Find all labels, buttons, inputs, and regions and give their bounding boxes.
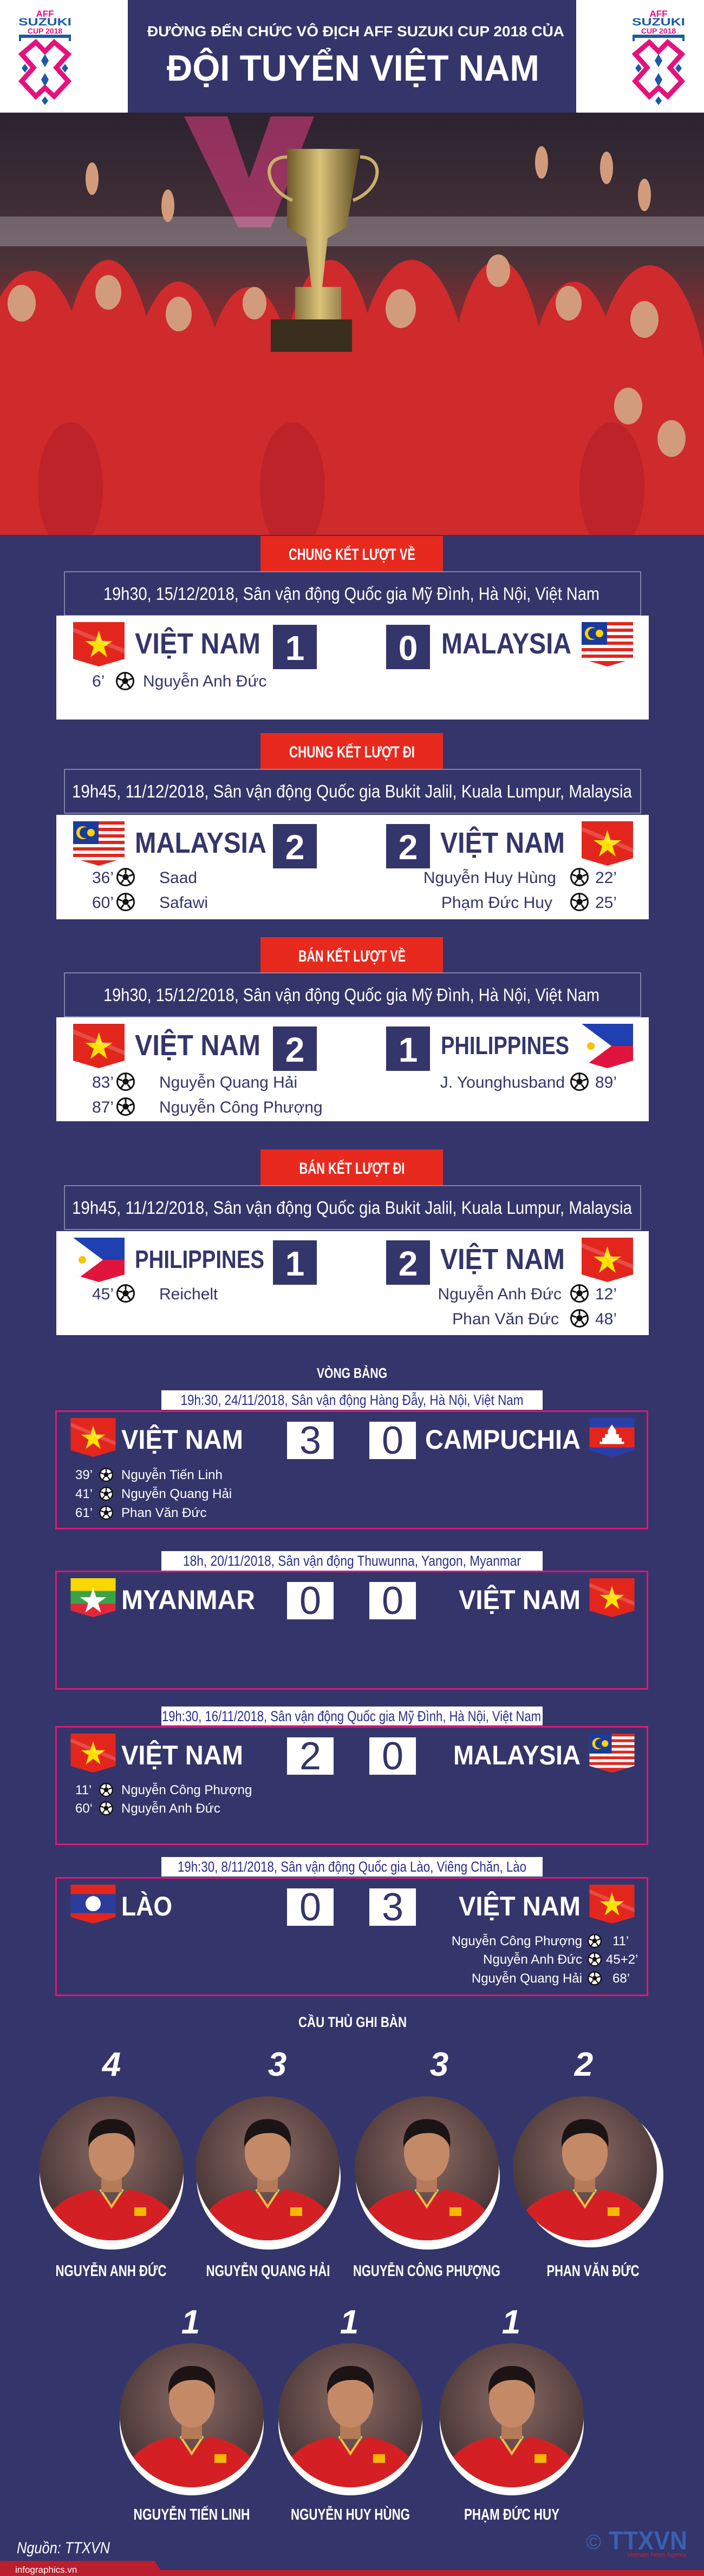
scoreboard: Myanmar 0-0 Việt Nam: VIỆT NAM: [459, 1585, 581, 1615]
title line 2: ĐỘI TUYỂN VIỆT NAM: [167, 47, 539, 89]
footer bar: [0, 2561, 704, 2576]
scoreboard: Philippines 1-2 Việt Nam: Reichelt: [159, 1285, 218, 1303]
scoreboard: Malaysia 2-2 Việt Nam: 60’: [92, 894, 114, 912]
scoreboard: Philippines 1-2 Việt Nam: VIỆT NAM: [440, 1243, 565, 1276]
logo: left AFF Suzuki Cup: CUP 2018: [28, 27, 62, 35]
trophy: [269, 149, 377, 352]
heading: vòng bảng: VÒNG BẢNG: [317, 1365, 387, 1381]
header: [0, 0, 704, 113]
title line 1: ĐƯỜNG ĐẾN CHỨC VÔ ĐỊCH AFF SUZUKI CUP 2018 CỦA: [147, 22, 564, 40]
scoreboard: Việt Nam 2-0 Malaysia: 11’: [75, 1783, 92, 1797]
scoreboard: Philippines 1-2 Việt Nam: Phan Văn Đức: [452, 1310, 559, 1328]
scoreboard: Malaysia 2-2 Việt Nam: [56, 815, 649, 919]
match info: chung kết lượt về: 19h30, 15/12/2018, Sân vận động Quốc gia Mỹ Đình, Hà Nội, Việt Nam: [103, 584, 599, 604]
scoreboard: Myanmar 0-0 Việt Nam: MYANMAR: [121, 1585, 255, 1615]
section header: bán kết lượt đi: BÁN KẾT LƯỢT ĐI: [299, 1159, 405, 1178]
scoreboard: Lào 0-3 Việt Nam: VIỆT NAM: [459, 1891, 581, 1921]
scorer: Nguyễn Huy Hùng: NGUYỄN HUY HÙNG: [291, 2505, 410, 2523]
match info: bán kết lượt về: 19h30, 15/12/2018, Sân vận động Quốc gia Mỹ Đình, Hà Nội, Việt Nam: [103, 985, 599, 1005]
scoreboard: Malaysia 2-2 Việt Nam: 36’: [92, 869, 114, 887]
scorer: Phạm Đức Huy: 1: [502, 2304, 520, 2341]
scoreboard: Việt Nam 2-0 Malaysia: Nguyễn Anh Đức: [121, 1801, 220, 1816]
scoreboard: Việt Nam 3-0 Campuchia: 61’: [75, 1506, 93, 1520]
scoreboard: Lào 0-3 Việt Nam: 3: [382, 1886, 403, 1929]
scoreboard: Việt Nam 2-0 Malaysia: 2: [299, 1735, 321, 1778]
scoreboard: Myanmar 0-0 Việt Nam: 0: [299, 1579, 321, 1623]
footer bar: infographics.vn: [15, 2565, 77, 2575]
source note: Nguồn: TTXVN: [17, 2539, 110, 2557]
scoreboard: Việt Nam 3-0 Campuchia: 0: [382, 1419, 403, 1462]
match info: chung kết lượt về: [64, 572, 641, 616]
match info: bán kết lượt về: [64, 973, 641, 1017]
title panel: [128, 0, 576, 113]
scoreboard: Myanmar 0-0 Việt Nam: [56, 1571, 648, 1689]
logo: TTXVN: TTXVN: [609, 2527, 687, 2555]
heading: cầu thủ ghi bàn: CẦU THỦ GHI BÀN: [298, 2013, 407, 2030]
scoreboard: Philippines 1-2 Việt Nam: 45’: [92, 1285, 114, 1303]
scoreboard: Việt Nam 2-1 Philippines: Nguyễn Công Phượng: [159, 1099, 323, 1116]
logo: TTXVN: ©: [586, 2531, 601, 2554]
scoreboard: Việt Nam 2-1 Philippines: 87’: [92, 1099, 114, 1116]
scorer: Phan Văn Đức: [513, 2046, 663, 2280]
scorer: Nguyễn Tiến Linh: 1: [181, 2304, 200, 2341]
section header: chung kết lượt về: [260, 536, 443, 572]
scoreboard: Việt Nam 2-0 Malaysia: 60‘: [75, 1801, 93, 1816]
logo: right AFF Suzuki Cup: CUP 2018: [641, 27, 676, 35]
scoreboard: Lào 0-3 Việt Nam: LÀO: [121, 1891, 172, 1921]
scorer: Nguyễn Tiến Linh: [120, 2304, 264, 2523]
scoreboard: Việt Nam 2-0 Malaysia: 0: [382, 1735, 403, 1778]
scoreboard: Việt Nam 2-1 Philippines: 89’: [595, 1074, 617, 1091]
scoreboard: Philippines 1-2 Việt Nam: 12’: [595, 1285, 617, 1303]
scoreboard: Philippines 1-2 Việt Nam: 2: [399, 1244, 418, 1283]
scoreboard: Việt Nam 1-0 Malaysia: 0: [399, 629, 418, 668]
scoreboard: Việt Nam 1-0 Malaysia: VIỆT NAM: [135, 627, 260, 660]
match info: bán kết lượt đi: 19h45, 11/12/2018, Sân vận động Quốc gia Bukit Jalil, Kuala Lumpur, Malaysia: [72, 1198, 633, 1218]
scoreboard: Việt Nam 1-0 Malaysia: 6’: [92, 672, 105, 690]
scorer: Nguyễn Công Phượng: [353, 2046, 500, 2280]
section header: chung kết lượt về: CHUNG KẾT LƯỢT VỀ: [289, 545, 415, 564]
logo: right AFF Suzuki Cup: [576, 0, 704, 113]
section header: bán kết lượt về: [260, 937, 443, 973]
scorer: Nguyễn Anh Đức: [40, 2046, 184, 2280]
scorer: Phan Văn Đức: 2: [574, 2046, 593, 2083]
scoreboard: Myanmar 0-0 Việt Nam: 0: [382, 1579, 403, 1623]
scorer: Nguyễn Công Phượng: NGUYỄN CÔNG PHƯỢNG: [353, 2261, 500, 2280]
scoreboard: Việt Nam 3-0 Campuchia: Nguyễn Quang Hải: [121, 1487, 232, 1501]
scoreboard: Malaysia 2-2 Việt Nam: VIỆT NAM: [440, 826, 565, 859]
scoreboard: Việt Nam 1-0 Malaysia: MALAYSIA: [441, 627, 571, 660]
scoreboard: Việt Nam 2-1 Philippines: J. Younghusband: [440, 1074, 565, 1091]
logo: right AFF Suzuki Cup: AFF: [649, 9, 668, 19]
scoreboard: Malaysia 2-2 Việt Nam: 22’: [595, 869, 617, 887]
scorer: Phạm Đức Huy: [440, 2304, 584, 2523]
scoreboard: Việt Nam 3-0 Campuchia: 3: [299, 1419, 321, 1462]
scoreboard: Việt Nam 3-0 Campuchia: [56, 1411, 648, 1529]
scoreboard: Việt Nam 1-0 Malaysia: Nguyễn Anh Đức: [143, 672, 267, 690]
match info: chung kết lượt đi: [64, 769, 641, 813]
logo: TTXVN: Vietnam News Agency: [627, 2552, 687, 2558]
logo: left AFF Suzuki Cup: AFF: [36, 9, 54, 19]
scoreboard: Malaysia 2-2 Việt Nam: Phạm Đức Huy: [441, 894, 552, 912]
scoreboard: Lào 0-3 Việt Nam: Nguyễn Công Phượng: [452, 1934, 582, 1949]
scoreboard: Malaysia 2-2 Việt Nam: Nguyễn Huy Hùng: [423, 869, 556, 887]
scoreboard: Việt Nam 2-0 Malaysia: MALAYSIA: [453, 1740, 581, 1770]
hero photo: team celebrating with trophy: [0, 113, 704, 535]
scoreboard: Việt Nam 2-1 Philippines: 2: [285, 1030, 304, 1069]
scorer: Nguyễn Quang Hải: [195, 2046, 341, 2280]
scoreboard: Việt Nam 3-0 Campuchia: 39’: [75, 1468, 93, 1482]
scoreboard: Việt Nam 3-0 Campuchia: Phan Văn Đức: [121, 1506, 207, 1520]
scoreboard: Việt Nam 3-0 Campuchia: Nguyễn Tiến Linh: [121, 1468, 223, 1482]
scoreboard: Philippines 1-2 Việt Nam: 48’: [595, 1310, 617, 1328]
scoreboard: Malaysia 2-2 Việt Nam: 25’: [595, 894, 617, 912]
section header: bán kết lượt đi: [260, 1149, 443, 1186]
scoreboard: Lào 0-3 Việt Nam: 45+2’: [606, 1952, 638, 1967]
scorer: Nguyễn Quang Hải: NGUYỄN QUANG HẢI: [206, 2261, 330, 2280]
scoreboard: Lào 0-3 Việt Nam: 0: [299, 1886, 321, 1929]
scoreboard: Việt Nam 2-1 Philippines: VIỆT NAM: [135, 1029, 260, 1062]
scoreboard: Việt Nam 2-1 Philippines: Nguyễn Quang Hải: [159, 1074, 297, 1091]
scorer: Nguyễn Công Phượng: 3: [430, 2046, 448, 2083]
scoreboard: Việt Nam 2-0 Malaysia: Nguyễn Công Phượng: [121, 1783, 252, 1797]
scorer: Phạm Đức Huy: PHẠM ĐỨC HUY: [464, 2505, 559, 2523]
scoreboard: Việt Nam 2-1 Philippines: 83’: [92, 1074, 114, 1091]
scoreboard: Lào 0-3 Việt Nam: Nguyễn Anh Đức: [483, 1952, 582, 1967]
scoreboard: Việt Nam 2-1 Philippines: 1: [399, 1030, 418, 1069]
match info: chung kết lượt đi: 19h45, 11/12/2018, Sân vận động Quốc gia Bukit Jalil, Kuala Lumpur, Malaysia: [72, 781, 633, 801]
scorer: Nguyễn Huy Hùng: [278, 2304, 422, 2523]
scoreboard: Việt Nam 2-0 Malaysia: VIỆT NAM: [121, 1740, 243, 1770]
scoreboard: Philippines 1-2 Việt Nam: Nguyễn Anh Đức: [438, 1285, 562, 1303]
scoreboard: Malaysia 2-2 Việt Nam: Saad: [159, 869, 197, 887]
scoreboard: Philippines 1-2 Việt Nam: 1: [285, 1244, 304, 1283]
scorer: Nguyễn Tiến Linh: NGUYỄN TIẾN LINH: [133, 2505, 250, 2523]
scorer: Nguyễn Quang Hải: 3: [268, 2046, 286, 2083]
scoreboard: Malaysia 2-2 Việt Nam: Safawi: [159, 894, 208, 912]
scoreboard: Lào 0-3 Việt Nam: 68’: [612, 1971, 630, 1986]
match info: VN - Campuchia: 19h:30, 24/11/2018, Sân vận động Hàng Đẫy, Hà Nội, Việt Nam: [181, 1391, 523, 1408]
logo: left AFF Suzuki Cup: SUZUKI: [18, 17, 71, 28]
scorer: Nguyễn Anh Đức: NGUYỄN ANH ĐỨC: [55, 2261, 167, 2280]
scorer: Nguyễn Anh Đức: 4: [101, 2046, 121, 2083]
scoreboard: Việt Nam 2-1 Philippines: PHILIPPINES: [441, 1031, 569, 1060]
scoreboard: Việt Nam 1-0 Malaysia: [56, 616, 649, 720]
scoreboard: Malaysia 2-2 Việt Nam: 2: [285, 828, 304, 867]
scoreboard: Philippines 1-2 Việt Nam: PHILIPPINES: [135, 1245, 264, 1273]
logo: TTXVN: [586, 2527, 687, 2558]
match info: VN - Malaysia: 19h:30, 16/11/2018, Sân vận động Quốc gia Mỹ Đình, Hà Nội, Việt Nam: [162, 1708, 541, 1724]
logo: left AFF Suzuki Cup: [0, 0, 128, 113]
scoreboard: Việt Nam 3-0 Campuchia: CAMPUCHIA: [425, 1424, 581, 1455]
match info: Myanmar - VN: 18h, 20/11/2018, Sân vận động Thuwunna, Yangon, Myanmar: [183, 1553, 521, 1569]
match info: Lào - VN: 19h:30, 8/11/2018, Sân vận động Quốc gia Lào, Viêng Chăn, Lào: [178, 1859, 526, 1875]
scoreboard: Malaysia 2-2 Việt Nam: MALAYSIA: [135, 827, 266, 859]
scorer: Phan Văn Đức: PHAN VĂN ĐỨC: [547, 2261, 640, 2280]
scoreboard: Việt Nam 2-0 Malaysia: [56, 1727, 648, 1844]
scoreboard: Malaysia 2-2 Việt Nam: 2: [399, 828, 418, 867]
scoreboard: Philippines 1-2 Việt Nam: [56, 1231, 649, 1335]
section header: bán kết lượt về: BÁN KẾT LƯỢT VỀ: [298, 947, 406, 965]
scorer: Nguyễn Huy Hùng: 1: [340, 2304, 358, 2341]
scoreboard: Lào 0-3 Việt Nam: 11’: [612, 1934, 629, 1949]
scoreboard: Việt Nam 1-0 Malaysia: 1: [285, 629, 304, 668]
section header: chung kết lượt đi: [260, 733, 443, 769]
scoreboard: Lào 0-3 Việt Nam: [56, 1878, 648, 1996]
scoreboard: Việt Nam 2-1 Philippines: [56, 1017, 649, 1121]
section header: chung kết lượt đi: CHUNG KẾT LƯỢT ĐI: [289, 743, 415, 761]
scoreboard: Việt Nam 3-0 Campuchia: 41’: [75, 1487, 93, 1501]
match info: bán kết lượt đi: [64, 1186, 641, 1230]
scoreboard: Việt Nam 3-0 Campuchia: VIỆT NAM: [121, 1424, 243, 1455]
logo: right AFF Suzuki Cup: SUZUKI: [632, 17, 685, 28]
scoreboard: Lào 0-3 Việt Nam: Nguyễn Quang Hải: [472, 1971, 582, 1986]
